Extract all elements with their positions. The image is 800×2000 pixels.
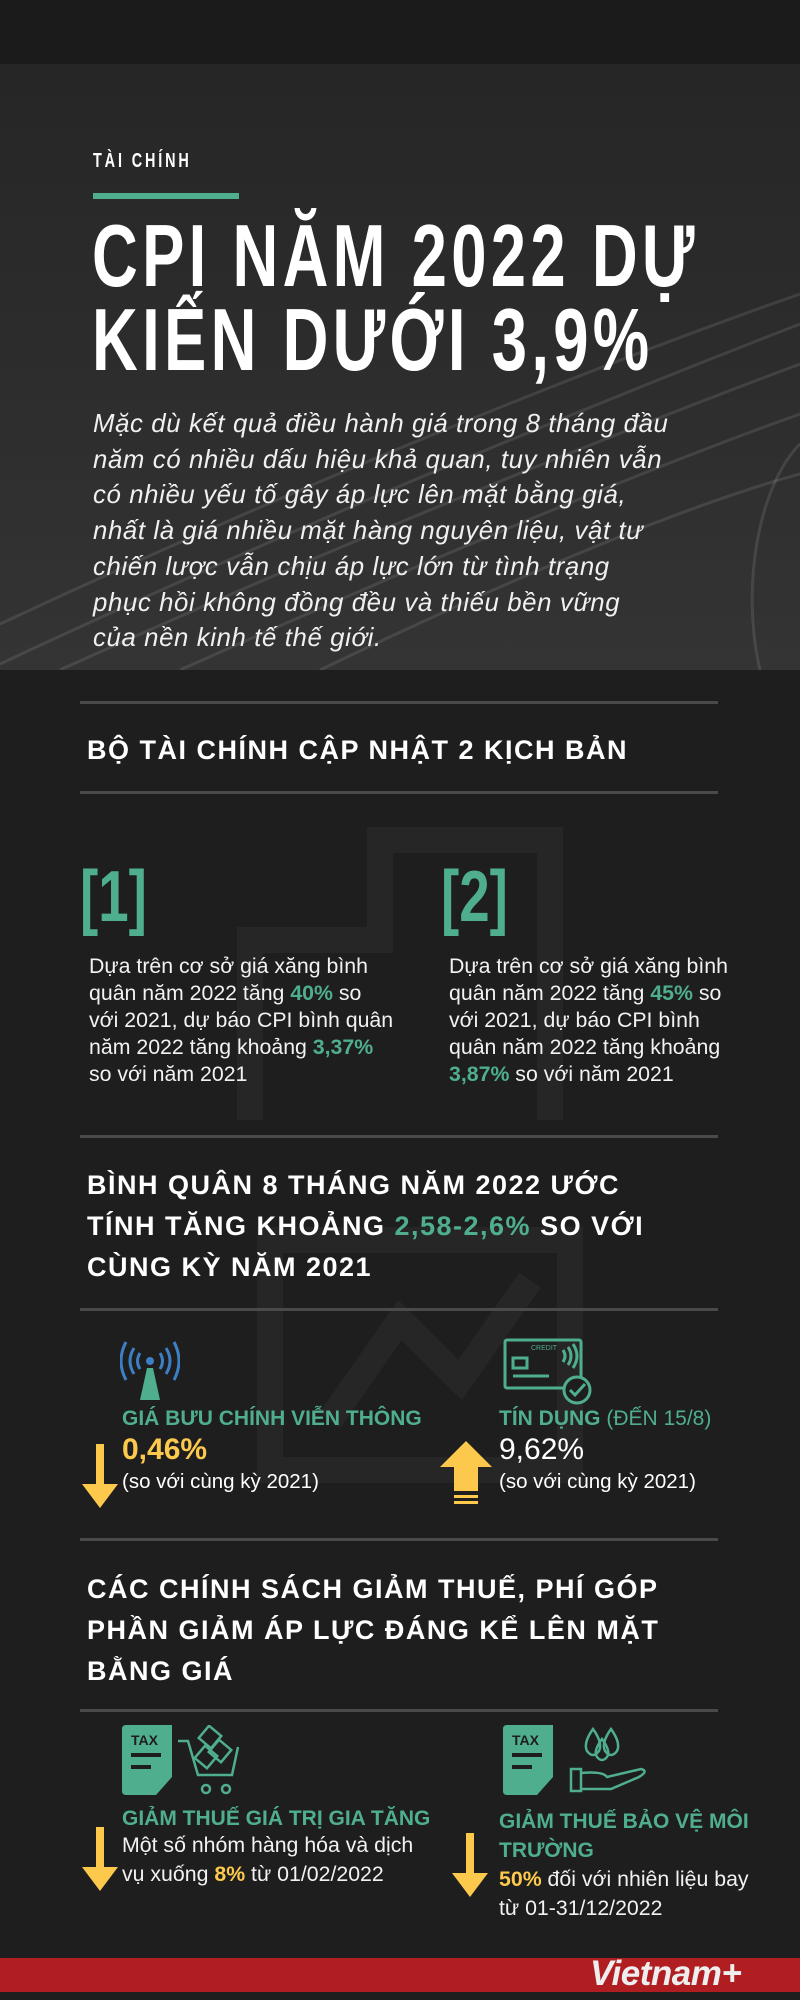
title: CPI NĂM 2022 DỰ: [92, 206, 699, 305]
green accent line: [93, 193, 239, 199]
stat: postal telecom: (so với cùng kỳ 2021): [122, 1470, 319, 1493]
icon: tax + hand drops: TAX: [512, 1732, 540, 1748]
scenario 2: quân năm 2022 tăng khoảng: [449, 1035, 720, 1059]
heading: tax policies: BẰNG GIÁ: [87, 1656, 234, 1686]
scenario 2: Dựa trên cơ sở giá xăng bình: [449, 954, 728, 978]
icon: tax + cart: TAX: [131, 1732, 159, 1748]
hero panel: [0, 64, 800, 670]
intro paragraph: nhất là giá nhiều mặt hàng nguyên liệu, vật tư: [93, 517, 643, 545]
item: environment tax: từ 01-31/12/2022: [499, 1896, 662, 1920]
scenario 2: 3,87% so với năm 2021: [449, 1062, 674, 1086]
stat: credit: 9,62%: [499, 1433, 584, 1466]
intro paragraph: [92, 410, 668, 652]
icon: credit card: [504, 1338, 592, 1404]
heading: 8 months: TÍNH TĂNG KHOẢNG 2,58-2,6% SO VỚI: [87, 1211, 644, 1241]
heading: 8 months: BÌNH QUÂN 8 THÁNG NĂM 2022 ƯỚC: [87, 1170, 620, 1200]
icon: tax + cart: [122, 1725, 240, 1795]
stat: credit: TÍN DỤNG (ĐẾN 15/8): [499, 1407, 711, 1430]
scenario 1: quân năm 2022 tăng 40% so: [89, 981, 361, 1005]
item: environment tax: TRƯỜNG: [499, 1839, 594, 1862]
icon: tax + hand drops: [503, 1725, 646, 1795]
item: VAT reduction: Một số nhóm hàng hóa và dịch: [122, 1833, 413, 1857]
item: VAT reduction: vụ xuống 8% từ 01/02/2022: [122, 1862, 384, 1886]
title: KIẾN DƯỚI 3,9%: [92, 290, 653, 389]
scenario 1: [80, 857, 393, 1086]
heading: tax policies: CÁC CHÍNH SÁCH GIẢM THUẾ, PHÍ GÓP: [87, 1574, 659, 1604]
scenario 1: Dựa trên cơ sở giá xăng bình: [89, 954, 368, 978]
item: environment tax: [452, 1808, 749, 1920]
scenario 2: [441, 857, 728, 1086]
heading: 8 months: [87, 1170, 644, 1282]
background watermark icon: [230, 820, 590, 1540]
scenario 2: [2]: [441, 857, 508, 937]
intro paragraph: phục hồi không đồng đều và thiếu bền vững: [93, 589, 620, 617]
heading: scenarios: BỘ TÀI CHÍNH CẬP NHẬT 2 KỊCH BẢN: [87, 735, 628, 765]
stat: postal telecom: 0,46%: [122, 1433, 207, 1466]
icon: antenna: [120, 1341, 180, 1400]
item: environment tax: GIẢM THUẾ BẢO VỆ MÔI: [499, 1810, 749, 1833]
scenario 1: [1]: [80, 857, 147, 937]
stat: credit: (so với cùng kỳ 2021): [499, 1470, 696, 1493]
footer bar with logo: [0, 1958, 800, 1992]
footer bar with logo: Vietnam+: [590, 1954, 741, 1993]
intro paragraph: có nhiều yếu tố gây áp lực lên mặt bằng giá,: [93, 481, 626, 509]
icon: credit card: CREDIT: [531, 1345, 558, 1352]
intro paragraph: của nền kinh tế thế giới.: [93, 624, 382, 652]
stat: credit: [440, 1406, 711, 1504]
scenario 2: quân năm 2022 tăng 45% so: [449, 981, 721, 1005]
intro paragraph: chiến lược vẫn chịu áp lực lớn từ tình trạng: [93, 553, 610, 581]
stat: postal telecom: [82, 1406, 422, 1508]
scenario 1: với 2021, dự báo CPI bình quân: [89, 1008, 393, 1032]
scenario 1: so với năm 2021: [89, 1062, 247, 1086]
stat: postal telecom: GIÁ BƯU CHÍNH VIỄN THÔNG: [122, 1407, 422, 1430]
item: VAT reduction: GIẢM THUẾ GIÁ TRỊ GIA TĂNG: [122, 1807, 430, 1830]
item: environment tax: 50% đối với nhiên liệu bay: [499, 1867, 749, 1891]
heading: tax policies: PHẦN GIẢM ÁP LỰC ĐÁNG KỂ LÊN MẶT: [87, 1615, 659, 1645]
intro paragraph: Mặc dù kết quả điều hành giá trong 8 tháng đầu: [93, 410, 668, 438]
top bar: [0, 0, 800, 64]
heading: tax policies: [87, 1574, 659, 1686]
scenario 2: với 2021, dự báo CPI bình: [449, 1008, 700, 1032]
item: VAT reduction: [82, 1806, 430, 1891]
category label: TÀI CHÍNH: [93, 150, 192, 172]
scenario 1: năm 2022 tăng khoảng 3,37%: [89, 1035, 373, 1059]
title: [92, 206, 699, 389]
intro paragraph: năm có nhiều dấu hiệu khả quan, tuy nhiên vẫn: [93, 446, 662, 474]
heading: 8 months: CÙNG KỲ NĂM 2021: [87, 1252, 372, 1282]
